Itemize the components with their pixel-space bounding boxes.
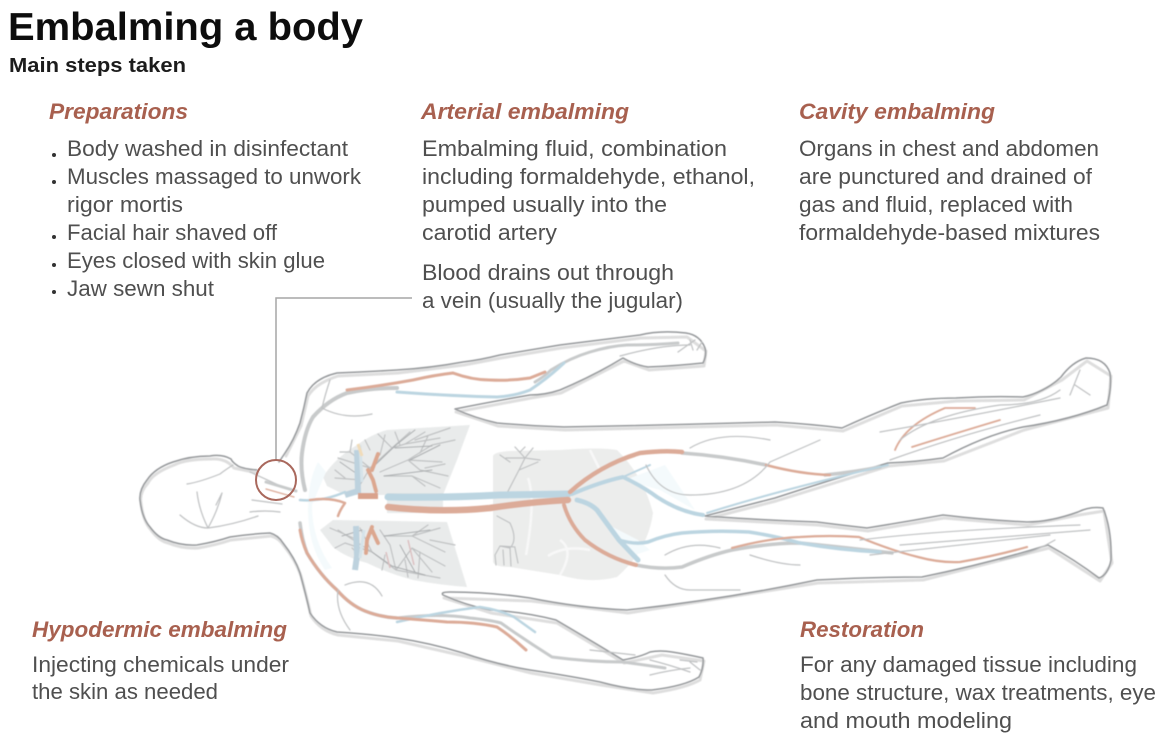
text block: arterial embalming: Blood drains out through (422, 260, 674, 285)
callout circle: neck incision (256, 460, 296, 500)
text block: cavity embalming: Cavity embalming (799, 99, 996, 124)
organs: abdomen (493, 448, 653, 580)
text block: cavity embalming: gas and fluid, replaced with (799, 192, 1073, 217)
text block: arterial embalming: including formaldehyde, ethanol, (422, 164, 755, 189)
text block: preparations: Facial hair shaved off (67, 220, 278, 245)
text block: arterial embalming: pumped usually into the (422, 192, 667, 217)
text block: hypodermic embalming (32, 617, 289, 704)
text block: restoration: For any damaged tissue including (800, 652, 1137, 677)
text block: preparations: Muscles massaged to unwork (67, 164, 362, 189)
text block: arterial embalming: Arterial embalming (420, 99, 630, 124)
text block: arterial embalming (420, 99, 755, 313)
text block: cavity embalming: formaldehyde-based mixtures (799, 220, 1100, 245)
thin detail lines (322, 340, 1090, 675)
text block: hypodermic embalming: Injecting chemicals under (32, 652, 289, 677)
text block: preparations: Jaw sewn shut (67, 276, 214, 301)
text block: restoration: and mouth modeling (800, 708, 1012, 733)
text block: cavity embalming: are punctured and drained of (799, 164, 1093, 189)
text block: preparations (49, 99, 362, 301)
vessel tint (308, 462, 695, 570)
pulmonary vessels (345, 450, 358, 570)
head details (180, 465, 296, 528)
title: Embalming a body (8, 6, 363, 49)
text block: restoration: Restoration (800, 617, 924, 642)
leader line (276, 298, 412, 461)
body outline (140, 332, 1111, 690)
text block: hypodermic embalming: Hypodermic embalming (32, 617, 288, 642)
text block: cavity embalming (799, 99, 1100, 245)
body outline shadow (141, 337, 1112, 693)
text block: arterial embalming: carotid artery (422, 220, 557, 245)
major vessels: grey (301, 388, 397, 490)
text block: restoration: bone structure, wax treatments, eye (800, 680, 1156, 705)
text block: preparations: Preparations (49, 99, 188, 124)
text block: cavity embalming: Organs in chest and abdomen (799, 136, 1099, 161)
text block: arterial embalming: Embalming fluid, combination (422, 136, 727, 161)
text block: preparations: Body washed in disinfectant (67, 136, 348, 161)
text block: restoration (800, 617, 1156, 733)
text block: preparations: rigor mortis (67, 192, 183, 217)
text block: hypodermic embalming: the skin as needed (32, 679, 218, 704)
red arteries (347, 372, 545, 390)
text block: preparations: Eyes closed with skin glue (67, 248, 325, 273)
body diagram (140, 332, 1112, 693)
organs: lungs (320, 425, 470, 587)
text block: arterial embalming: a vein (usually the jugular) (422, 288, 683, 313)
subtitle: Main steps taken (9, 55, 186, 77)
blue veins (397, 363, 564, 397)
organs: intestine branches (495, 447, 540, 566)
veins and arteries (300, 343, 1027, 668)
